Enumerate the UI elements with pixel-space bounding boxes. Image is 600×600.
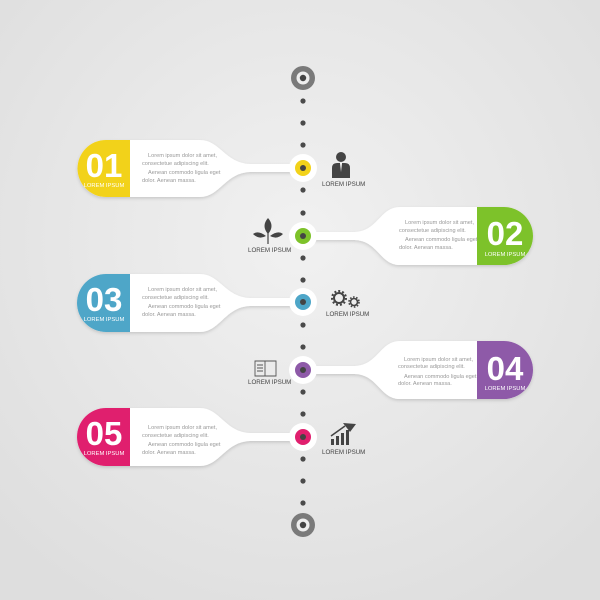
icon: gears: LOREM IPSUM [326, 311, 369, 318]
panel: step 05: dolor. Aenean massa. [142, 450, 196, 456]
panel: step 02: Aenean commodo ligula eget [405, 237, 478, 243]
panel: step 01: dolor. Aenean massa. [142, 178, 196, 184]
panel: step 05: Aenean commodo ligula eget [148, 442, 221, 448]
icon: growth chart: LOREM IPSUM [322, 449, 365, 456]
panel: step 05: consectetue adipiscing elit. [142, 433, 209, 439]
panel: step 02: Lorem ipsum dolor sit amet, [405, 220, 474, 226]
panel: step 04: dolor. Aenean massa. [398, 381, 452, 387]
icon: growth chart [322, 423, 365, 456]
icon: gears [326, 291, 369, 318]
panel: step 05 [77, 408, 317, 466]
icon: top target [291, 66, 315, 90]
panel: step 05: 05 [86, 415, 122, 452]
panel: step 04: Lorem ipsum dolor sit amet, [404, 357, 473, 363]
panel: step 05: LOREM IPSUM [84, 451, 124, 457]
panel: step 04: consectetue adipiscing elit. [398, 364, 465, 370]
icon: book: LOREM IPSUM [248, 379, 291, 386]
panel: step 02: dolor. Aenean massa. [399, 245, 453, 251]
panel: step 03: LOREM IPSUM [84, 317, 124, 323]
panel: step 05: Lorem ipsum dolor sit amet, [148, 425, 217, 431]
panel: step 03: Lorem ipsum dolor sit amet, [148, 287, 217, 293]
panel: step 01: Lorem ipsum dolor sit amet, [148, 153, 217, 159]
icon: book [248, 361, 291, 386]
panel: step 01: 01 [86, 147, 122, 184]
panel: step 03: dolor. Aenean massa. [142, 312, 196, 318]
panel: step 03: consectetue adipiscing elit. [142, 295, 209, 301]
panel: step 02: LOREM IPSUM [485, 252, 525, 258]
panel: step 04: 04 [487, 350, 524, 387]
panel: step 01: LOREM IPSUM [84, 183, 124, 189]
icon: bottom target [291, 513, 315, 537]
panel: step 02: consectetue adipiscing elit. [399, 228, 466, 234]
panel: step 01: consectetue adipiscing elit. [142, 161, 209, 167]
panel: step 02 [289, 207, 533, 265]
icon: leaf [248, 218, 291, 254]
panel: step 03: 03 [86, 281, 122, 318]
panel: step 04 [289, 341, 533, 399]
panel: step 04: Aenean commodo ligula eget [404, 374, 477, 380]
panel: step 02: 02 [487, 215, 523, 252]
panel: step 01 [78, 140, 317, 197]
icon: person [322, 152, 365, 188]
panel: step 03: Aenean commodo ligula eget [148, 304, 221, 310]
panel: step 03 [77, 274, 317, 332]
timeline dots [300, 98, 306, 506]
panel: step 01: Aenean commodo ligula eget [148, 170, 221, 176]
icon: person: LOREM IPSUM [322, 181, 365, 188]
panel: step 04: LOREM IPSUM [485, 386, 525, 392]
icon: leaf: LOREM IPSUM [248, 247, 291, 254]
